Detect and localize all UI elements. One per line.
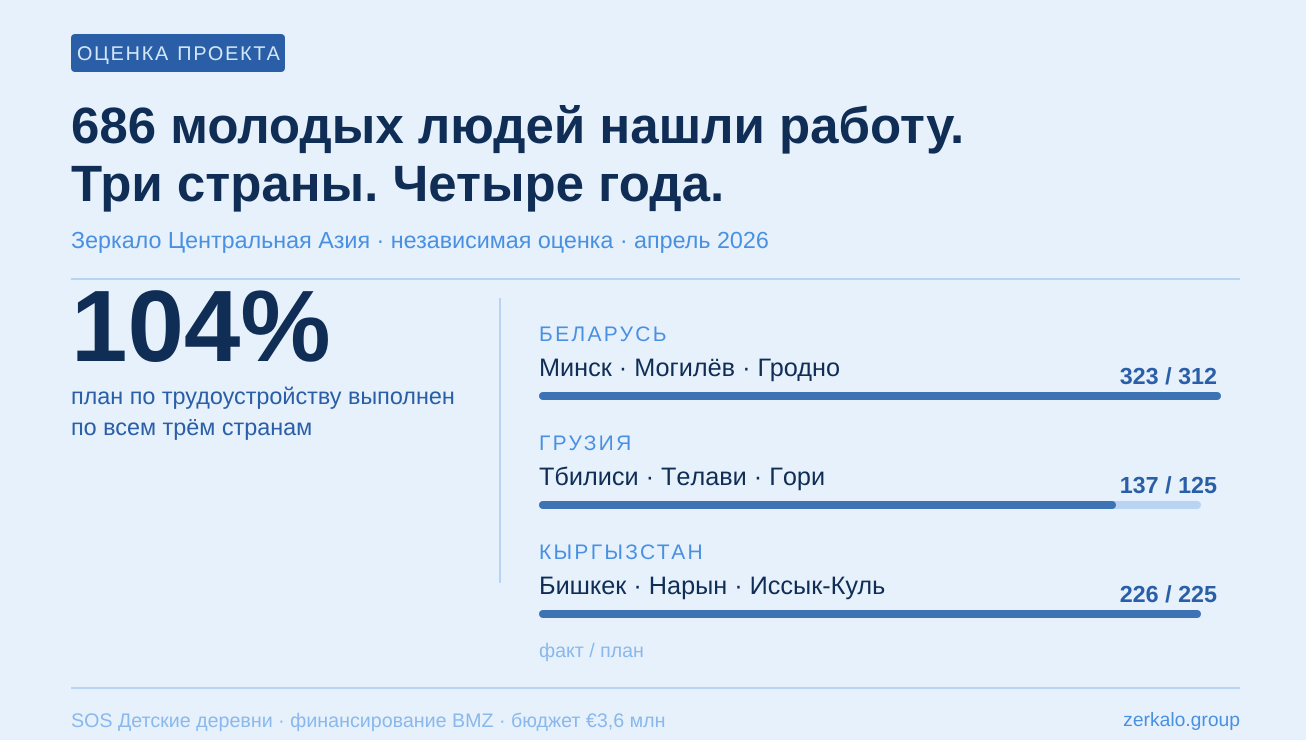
bar <box>539 392 1221 400</box>
bottom divider <box>71 687 1240 689</box>
bar fill <box>539 501 1116 509</box>
cities: Минск · Могилёв · Гродно <box>539 354 840 382</box>
big number caption: по всем трём странам <box>71 414 312 440</box>
title: 686 молодых людей нашли работу. <box>71 97 964 154</box>
panel: Belarus <box>539 323 1221 400</box>
panel: Kyrgyzstan <box>539 541 1217 618</box>
top divider <box>71 278 1240 280</box>
panel: Georgia <box>539 432 1217 509</box>
bar track <box>539 501 1201 509</box>
country label: ГРУЗИЯ <box>539 432 634 455</box>
badge <box>71 34 285 72</box>
bar <box>539 610 1201 618</box>
country label: БЕЛАРУСЬ <box>539 323 669 346</box>
cities: Бишкек · Нарын · Иссык-Куль <box>539 572 885 600</box>
footer right: zerkalo.group <box>1123 710 1240 731</box>
country label: КЫРГЫЗСТАН <box>539 541 705 564</box>
cities: Тбилиси · Телави · Гори <box>539 463 825 491</box>
value: 137 / 125 <box>1120 472 1217 498</box>
badge: ОЦЕНКА ПРОЕКТА <box>77 43 282 65</box>
value: 226 / 225 <box>1120 581 1217 607</box>
vertical divider <box>499 298 501 583</box>
legend note: факт / план <box>539 640 644 662</box>
big number caption: план по трудоустройству выполнен <box>71 383 455 409</box>
title: Три страны. Четыре года. <box>71 155 724 212</box>
big number caption <box>71 383 455 440</box>
value: 323 / 312 <box>1120 363 1217 389</box>
footer left: SOS Детские деревни · финансирование BMZ · бюджет €3,6 млн <box>71 710 665 732</box>
subtitle: Зеркало Центральная Азия · независимая оценка · апрель 2026 <box>71 227 769 253</box>
big number: 104% <box>71 269 331 383</box>
title <box>71 97 964 212</box>
